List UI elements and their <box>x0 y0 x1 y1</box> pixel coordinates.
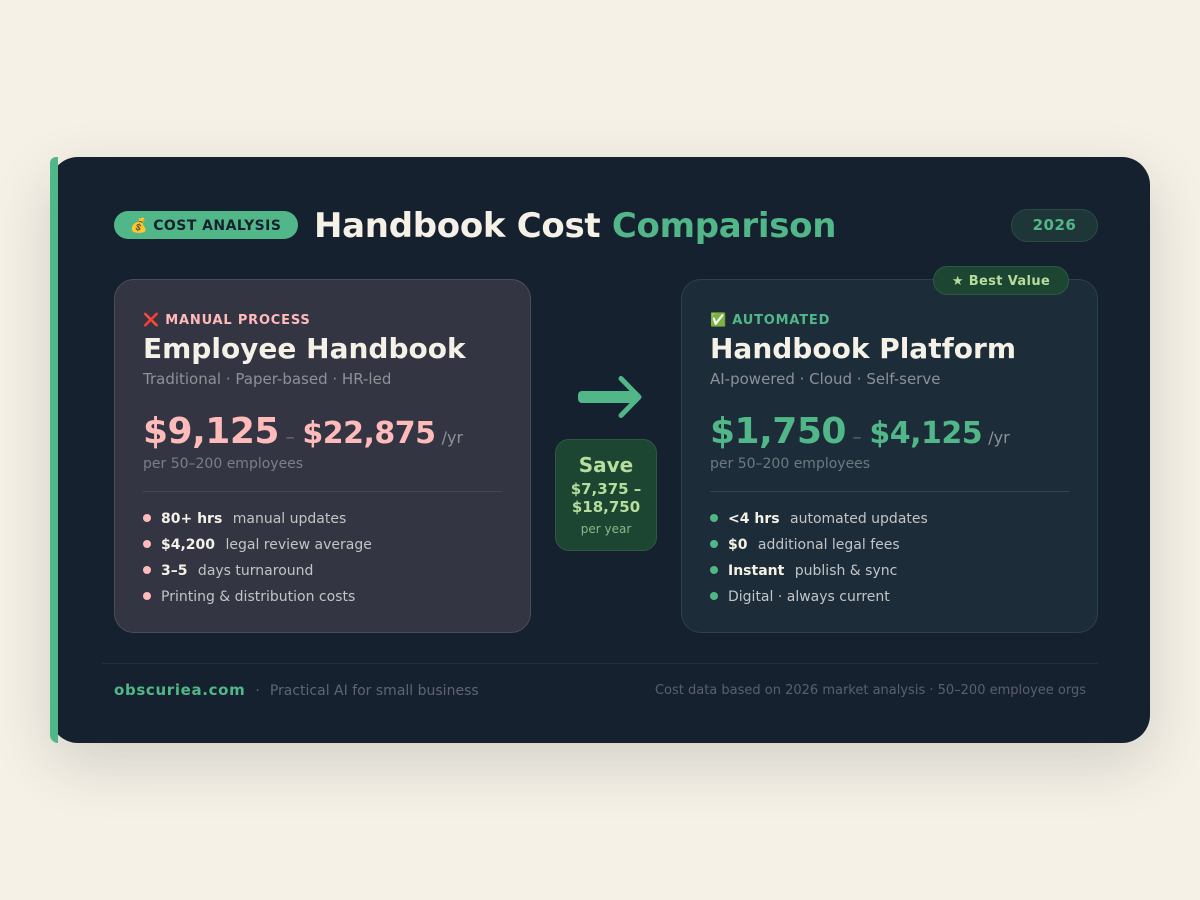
bullet 1: <4 hrs automated updates <box>728 511 928 527</box>
accent bar <box>50 157 58 743</box>
manual subtitle: Traditional · Paper-based · HR-led <box>143 370 391 388</box>
header badge: cost analysis <box>114 211 298 239</box>
savings callout <box>555 439 657 551</box>
bullet 2: $4,200 legal review average <box>161 537 372 553</box>
panel: manual process <box>114 279 531 633</box>
year badge: 2026 <box>1033 216 1076 234</box>
automated price: $1,750 – $4,125 /yr <box>710 411 1010 452</box>
bullet 4: Digital · always current <box>728 589 890 605</box>
year badge <box>1011 209 1098 242</box>
save label: Save <box>579 453 633 477</box>
manual price note: per 50–200 employees <box>143 456 303 472</box>
best value badge: ★ Best Value <box>952 274 1050 289</box>
manual bullet list <box>143 511 372 605</box>
save amount: $7,375 – <box>571 480 641 498</box>
title: Handbook Cost Comparison <box>314 206 836 246</box>
bullet 3: 3–5 days turnaround <box>161 563 313 579</box>
save amount: $18,750 <box>572 498 640 516</box>
save period: per year <box>581 522 631 536</box>
card background <box>50 157 1150 743</box>
automated bullet list <box>710 511 928 605</box>
bullet 1: 80+ hrs manual updates <box>161 511 346 527</box>
bullet 3: Instant publish & sync <box>728 563 897 579</box>
bullet 2: $0 additional legal fees <box>728 537 900 553</box>
automated subtitle: AI-powered · Cloud · Self-serve <box>710 370 940 388</box>
automated label: ✅ AUTOMATED <box>710 313 830 328</box>
manual label: ❌ MANUAL PROCESS <box>143 313 311 328</box>
automated price note: per 50–200 employees <box>710 456 870 472</box>
best value badge <box>933 266 1069 295</box>
manual price: $9,125 – $22,875 /yr <box>143 411 463 452</box>
panel: automated <box>681 279 1098 633</box>
automated heading: Handbook Platform <box>710 332 1016 365</box>
divider <box>710 491 1069 492</box>
footer source note: Cost data based on 2026 market analysis · 50–200 employee orgs <box>655 683 1086 698</box>
header badge: cost analysis: 💰 COST ANALYSIS <box>130 218 281 234</box>
footer divider <box>102 663 1098 664</box>
bullet 4: Printing & distribution costs <box>161 589 355 605</box>
manual heading: Employee Handbook <box>143 332 466 365</box>
arrow <box>578 376 642 418</box>
divider <box>143 491 502 492</box>
save amount <box>571 480 641 516</box>
footer brand: obscuriea.com · Practical AI for small business <box>114 681 479 699</box>
